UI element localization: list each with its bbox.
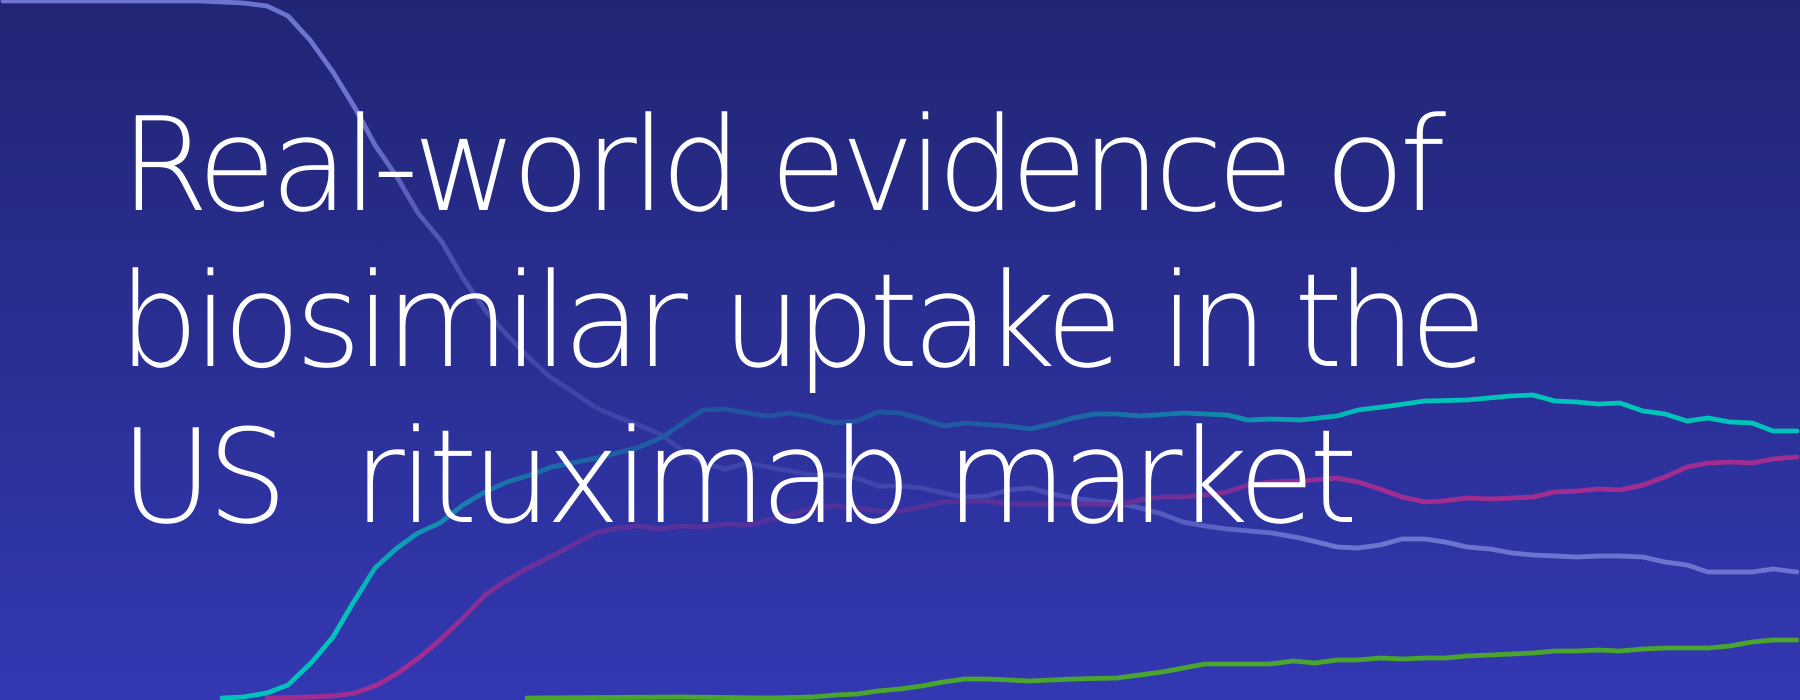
line: biosimilar B share — [267, 457, 1797, 698]
title line 3: market — [946, 401, 1352, 553]
title line 1: Real-world — [120, 89, 736, 241]
title line 2: in — [1160, 245, 1262, 397]
title line 1: evidence — [770, 89, 1288, 241]
title line 2: biosimilar — [118, 245, 688, 397]
title line 3: US — [120, 401, 282, 553]
title line 2: the — [1294, 245, 1481, 397]
line: biosimilar A share — [222, 395, 1797, 698]
title line 3: rituximab — [353, 401, 906, 553]
title line 1: of — [1324, 89, 1446, 241]
title — [118, 89, 1481, 553]
line: biosimilar C share — [527, 640, 1797, 698]
title line 2: uptake — [722, 245, 1117, 397]
